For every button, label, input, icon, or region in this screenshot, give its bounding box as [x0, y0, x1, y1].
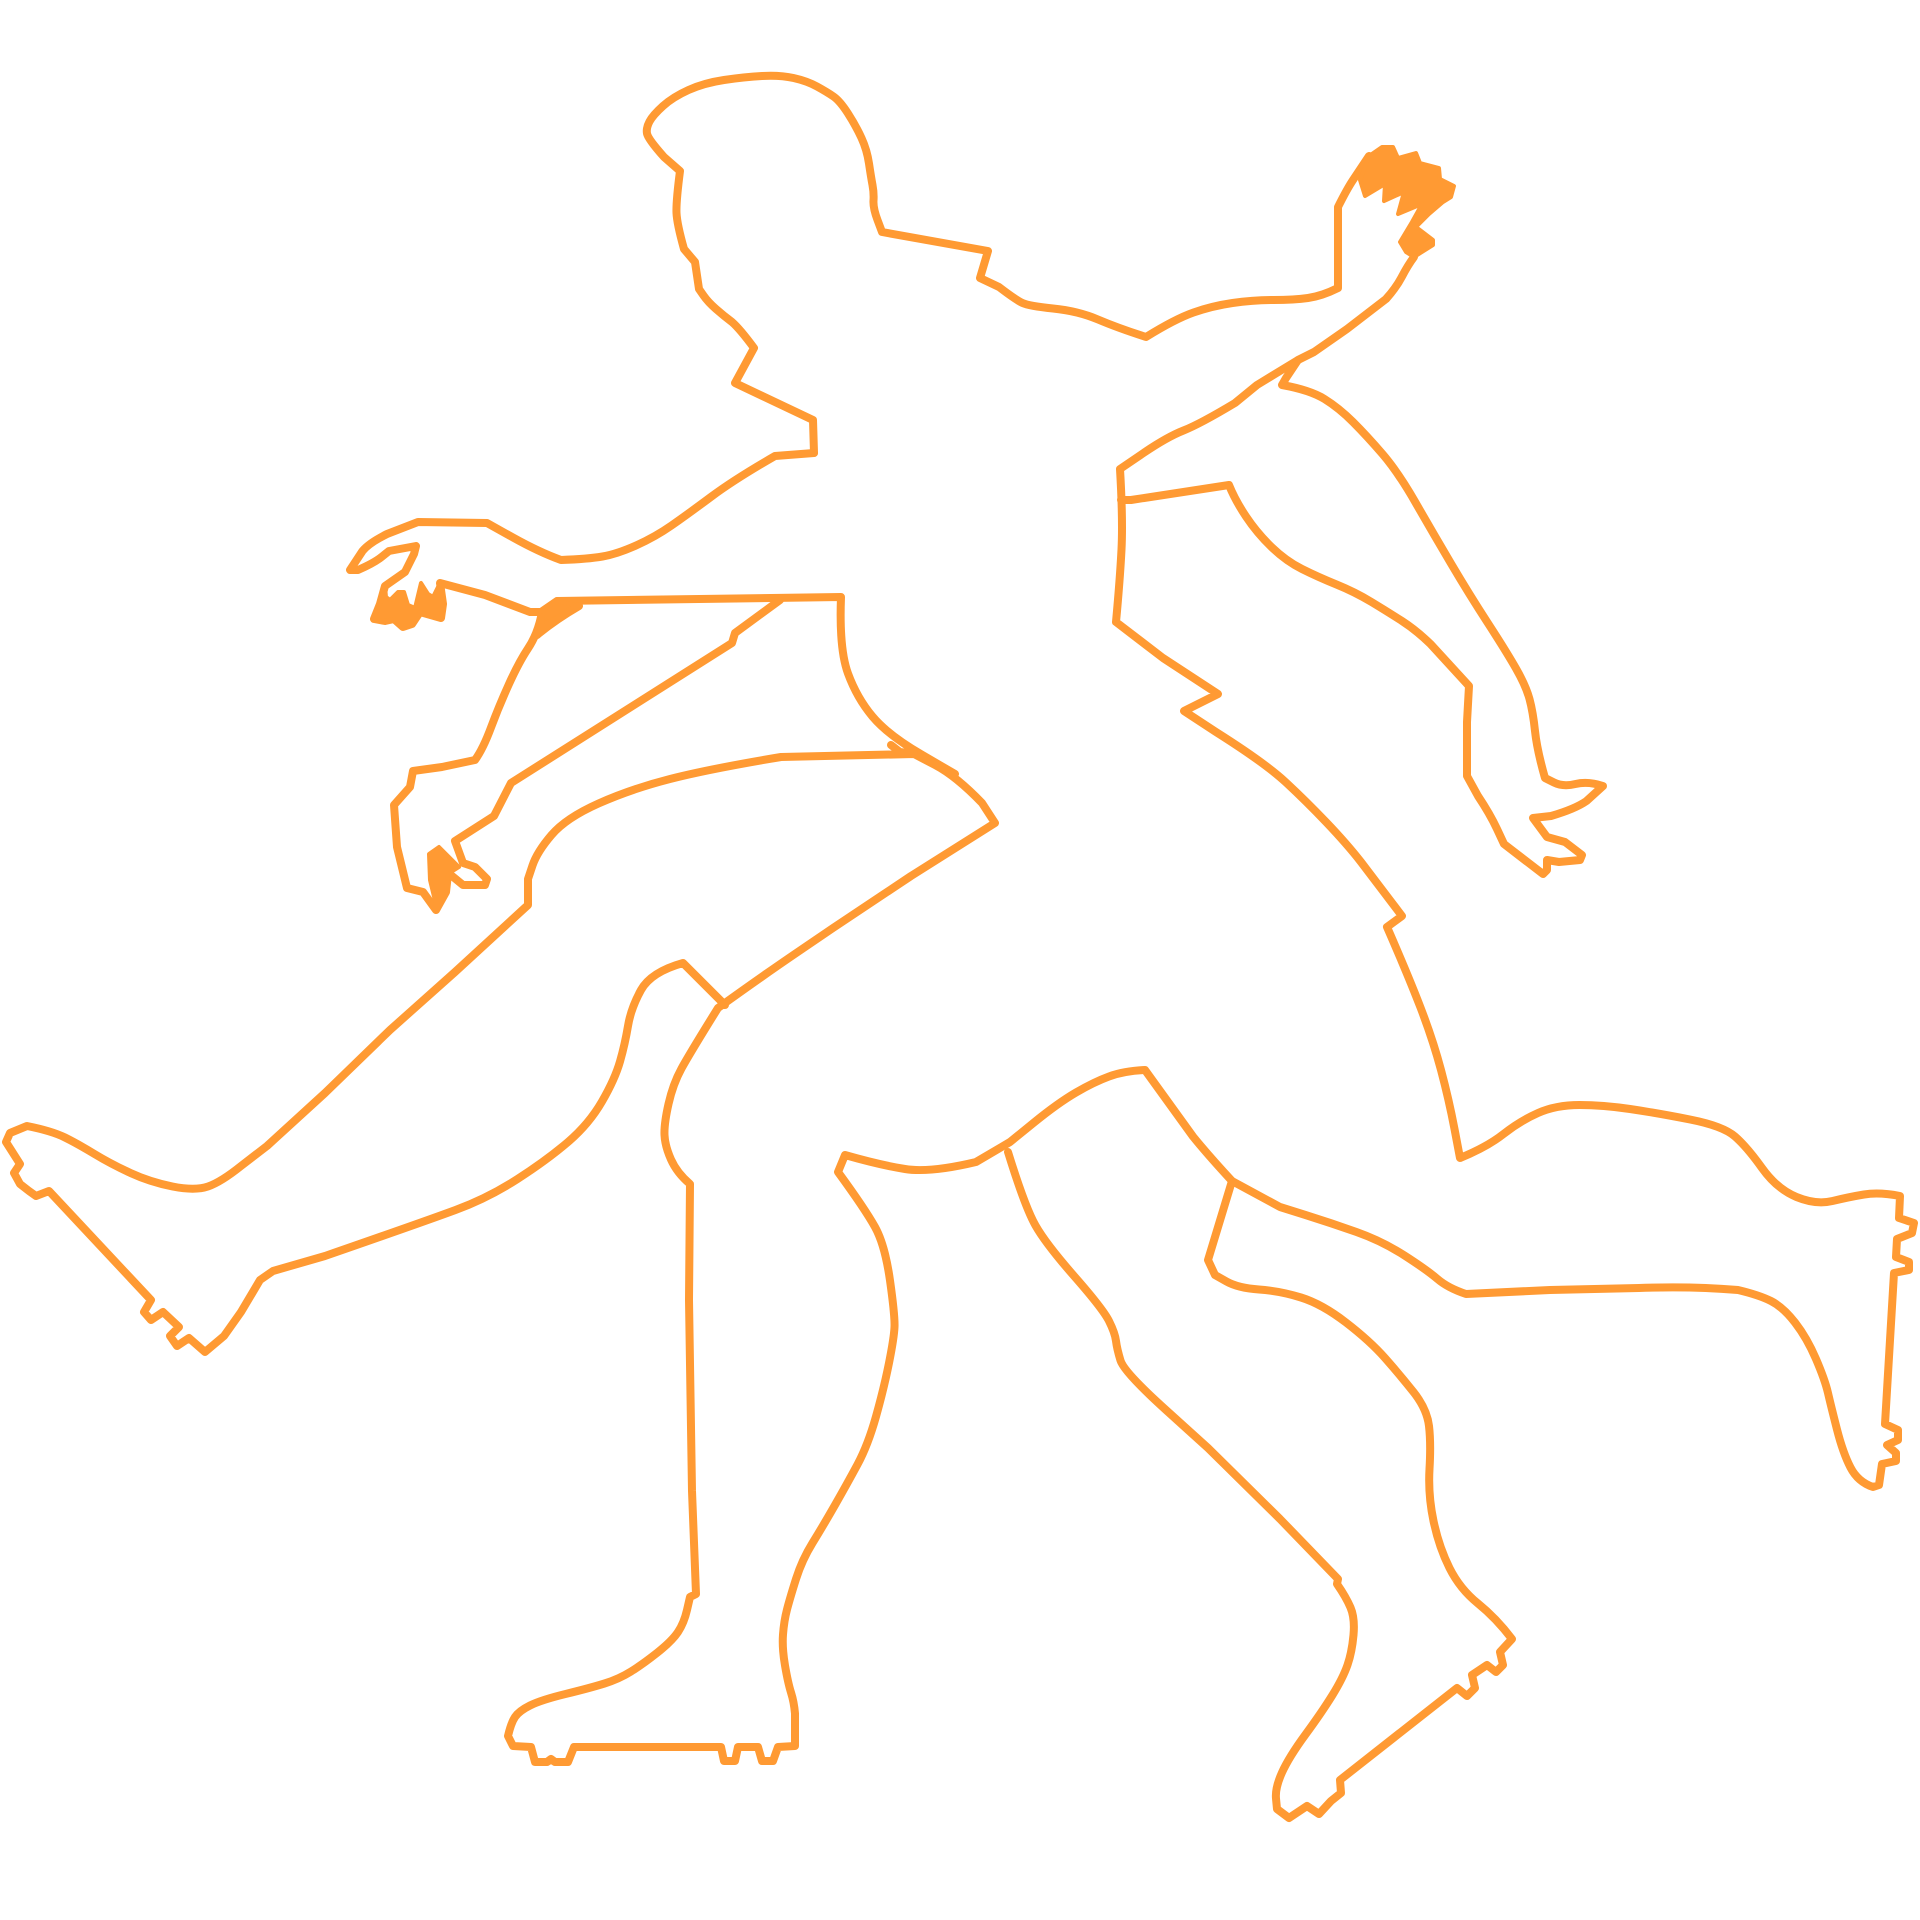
left lower arm and pointing hand	[350, 453, 955, 774]
icon: left hand fingers	[374, 583, 443, 627]
rear kicking leg and foot	[1008, 1152, 1512, 1818]
head and shoulders contour	[647, 76, 1369, 453]
raised arm, torso and front leg contour	[6, 257, 1914, 1762]
hip thick line	[891, 745, 914, 754]
right upper arm inner line	[1121, 360, 1603, 874]
icon: raised right hand	[1360, 147, 1454, 257]
icon: lower left hand fingers	[429, 847, 459, 905]
chest wedge and second arm line	[394, 600, 780, 910]
